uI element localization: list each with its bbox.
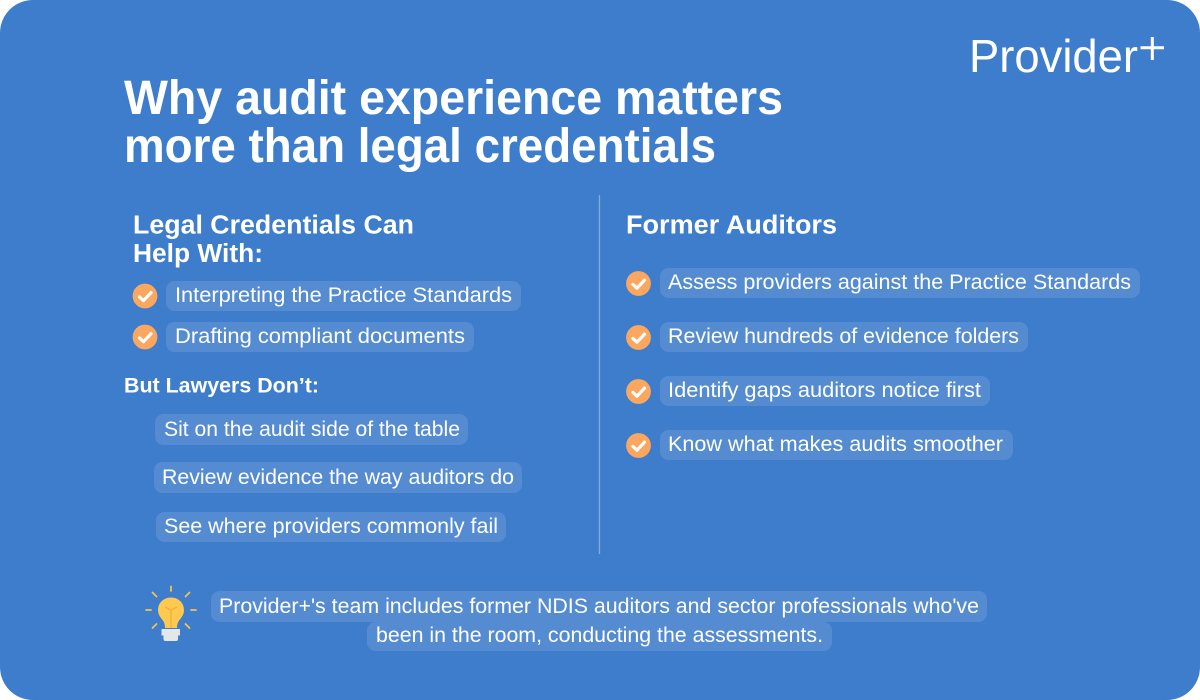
heading: legal credentials: Help With:: [133, 240, 263, 268]
title: [124, 72, 783, 173]
panel: legal credentials: [124, 212, 522, 542]
logo: Provider: [969, 30, 1138, 82]
list item: drafting: Drafting compliant documents: [175, 325, 465, 348]
list item: identify gaps: [626, 376, 990, 406]
panel: former auditors: [626, 212, 1140, 460]
list item: interpreting: Interpreting the Practice Standards: [175, 284, 512, 307]
callout: [211, 591, 987, 651]
callout: Provider+'s team includes former NDIS auditors and sector professionals who've: [219, 595, 979, 618]
list item: review evidence: [154, 462, 522, 493]
heading: legal credentials: [133, 212, 414, 268]
list item: smoother audits: Know what makes audits smoother: [668, 433, 1003, 456]
divider: [599, 195, 600, 554]
list item: audit side: Sit on the audit side of the table: [164, 418, 460, 441]
title: more than legal credentials: [124, 120, 716, 173]
list item: review folders: [626, 322, 1028, 352]
list item: identify gaps: Identify gaps auditors notice first: [668, 379, 981, 402]
title: Why audit experience matters: [124, 72, 783, 125]
list item: commonly fail: See where providers commonly fail: [164, 515, 498, 538]
list item: assess: Assess providers against the Practice Standards: [668, 271, 1131, 294]
list item: audit side: [155, 414, 468, 445]
callout: been in the room, conducting the assessments.: [376, 624, 823, 647]
subheading: but lawyers don't: But Lawyers Don’t:: [124, 374, 319, 398]
heading: former auditors: Former Auditors: [626, 212, 837, 240]
list item: interpreting: [133, 281, 521, 311]
icon: light bulb: [146, 586, 196, 641]
list item: assess: [626, 268, 1140, 298]
heading: legal credentials: Legal Credentials Can: [133, 212, 414, 240]
list item: review folders: Review hundreds of evidence folders: [668, 325, 1019, 348]
list item: drafting: [133, 322, 474, 352]
list item: review evidence: Review evidence the way auditors do: [162, 466, 514, 489]
list item: smoother audits: [626, 430, 1013, 460]
